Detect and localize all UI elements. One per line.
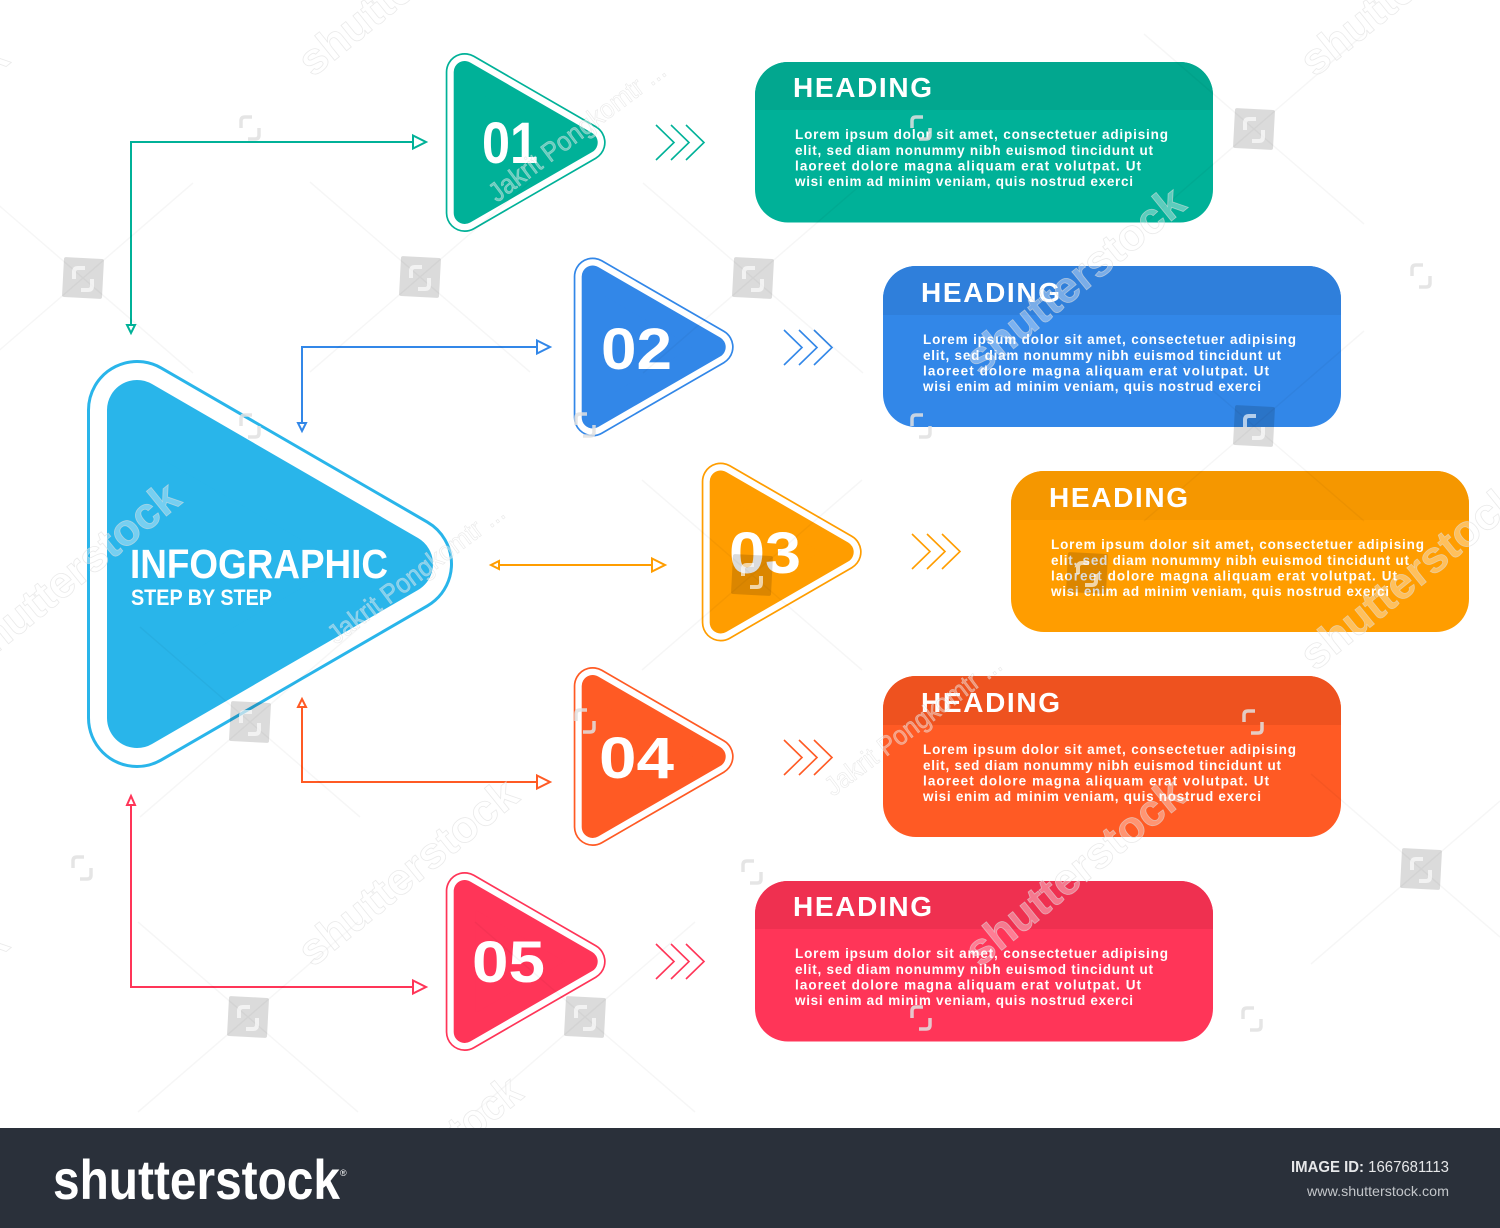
watermark: stock text overlays: shutterstock <box>288 769 528 976</box>
footer url: www.shutterstock.com <box>1306 1183 1449 1199</box>
step 04 triangle <box>593 686 715 827</box>
step 04 card: elit, sed diam nonummy nibh euismod tincidunt ut <box>923 758 1282 773</box>
step 03 card: wisi enim ad minim veniam, quis nostrud exerci <box>1050 584 1389 599</box>
watermark: stock text overlays: shutterstock <box>955 177 1195 384</box>
step 05 card: laoreet dolore magna aliquam erat volutpat. Ut <box>795 978 1142 992</box>
step 04 card: Lorem ipsum dolor sit amet, consectetuer adipising <box>923 742 1296 757</box>
arrow: connector 02 <box>298 340 550 431</box>
step 03 card: laoreet dolore magna aliquam erat volutpat. Ut <box>1051 568 1398 584</box>
step 04 card: HEADING <box>921 687 1060 718</box>
step 02 card: Lorem ipsum dolor sit amet, consectetuer adipising <box>923 332 1296 347</box>
step 02 card: HEADING <box>921 277 1060 308</box>
step 03 card: HEADING <box>1049 482 1188 513</box>
step 03 card: Lorem ipsum dolor sit amet, consectetuer adipising <box>1051 537 1424 552</box>
step 04 number: 04 <box>599 726 674 791</box>
arrow: connector 05 <box>127 796 426 994</box>
watermark: grey square marks <box>62 108 1442 1038</box>
step 03 card <box>1011 471 1469 632</box>
step 02 card: elit, sed diam nonummy nibh euismod tincidunt ut <box>923 348 1282 363</box>
step 05 card: elit, sed diam nonummy nibh euismod tincidunt ut <box>795 962 1154 977</box>
step 05 triangle <box>465 891 587 1032</box>
step 01 card <box>755 62 1213 222</box>
step 03 card: elit, sed diam nonummy nibh euismod tincidunt ut <box>1051 553 1410 568</box>
step 04 <box>593 676 1341 837</box>
step 05 number: 05 <box>472 930 545 995</box>
step 04 card: laoreet dolore magna aliquam erat volutpat. Ut <box>923 774 1270 788</box>
main triangle: infographic step by step <box>130 410 403 718</box>
arrow: connector 01 <box>127 136 426 333</box>
step 01 card: HEADING <box>793 72 932 103</box>
step 02 card: wisi enim ad minim veniam, quis nostrud exerci <box>922 379 1261 394</box>
step 04 card: wisi enim ad minim veniam, quis nostrud exerci <box>922 789 1261 804</box>
watermark: stock text overlays: tock <box>438 1066 532 1155</box>
step 02 chevrons <box>784 330 832 365</box>
main triangle: infographic step by step: STEP BY STEP <box>131 585 272 610</box>
step 05 card: HEADING <box>793 891 932 922</box>
step 02 card: laoreet dolore magna aliquam erat volutpat. Ut <box>923 364 1270 378</box>
watermark: stock text overlays: Jakrit Pongkomtr ... <box>483 55 672 208</box>
step 02 triangle <box>593 276 715 418</box>
step 01 card: wisi enim ad minim veniam, quis nostrud exerci <box>794 174 1133 189</box>
watermark: stock text overlays: Jakrit Pongkomtr ... <box>322 497 511 650</box>
watermark: small logo marks <box>73 117 1430 1030</box>
step 01 chevrons <box>656 125 704 160</box>
arrow: connector 03 <box>491 558 665 572</box>
step 05 card <box>755 881 1213 1042</box>
footer logo: shutterstock <box>53 1148 341 1211</box>
step 01 triangle <box>465 72 587 213</box>
step 01 card: elit, sed diam nonummy nibh euismod tincidunt ut <box>795 143 1154 158</box>
step 01 number: 01 <box>482 111 538 176</box>
step 03 number: 03 <box>729 521 801 586</box>
step 05 <box>465 881 1213 1042</box>
step 05 card: wisi enim ad minim veniam, quis nostrud exerci <box>794 993 1133 1008</box>
step 05 chevrons <box>656 944 704 979</box>
step 02 card <box>883 266 1341 427</box>
step 02 number: 02 <box>601 317 672 382</box>
main triangle: infographic step by step: INFOGRAPHIC <box>130 541 388 587</box>
step 01 card: laoreet dolore magna aliquam erat volutpat. Ut <box>795 158 1142 174</box>
step 04 card <box>883 676 1341 837</box>
step 05 card: Lorem ipsum dolor sit amet, consectetuer adipising <box>795 946 1168 961</box>
step 01 card: Lorem ipsum dolor sit amet, consectetuer adipising <box>795 127 1168 142</box>
watermark: stock text overlays: Jakrit Pongkomtr ... <box>819 649 1008 802</box>
step 03 chevrons <box>912 534 960 569</box>
step 04 chevrons <box>784 740 832 775</box>
footer bar <box>0 1128 1500 1228</box>
step 02 <box>593 266 1341 427</box>
footer reg mark: ® <box>340 1168 347 1178</box>
watermark: stock text overlays: shutterstock <box>955 769 1195 976</box>
footer image id: IMAGE ID: 1667681113 <box>1291 1159 1449 1176</box>
step 03 <box>721 471 1469 632</box>
arrow: connector 04 <box>298 699 550 788</box>
step 03 triangle <box>721 482 843 622</box>
step 01 <box>465 62 1213 222</box>
